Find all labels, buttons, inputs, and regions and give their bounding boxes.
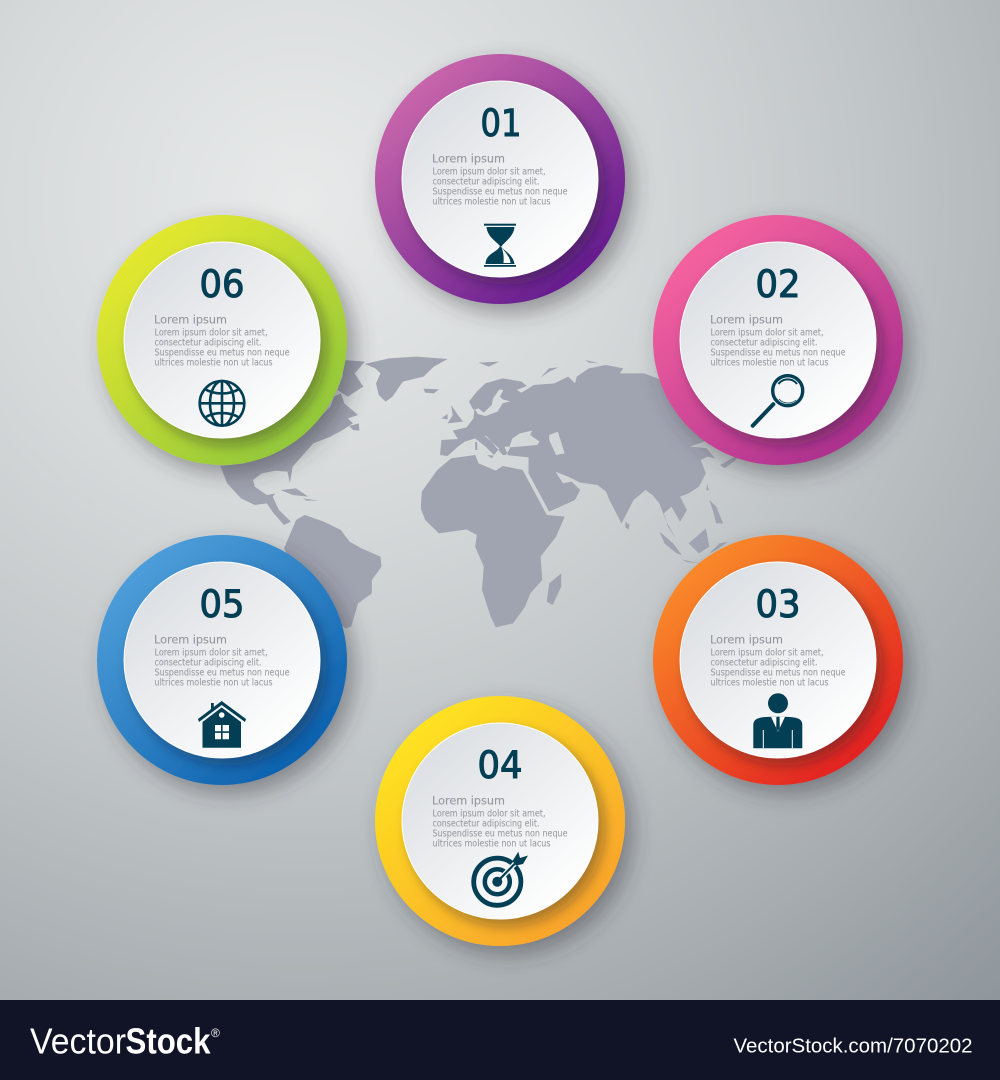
- number 01: 01: [480, 102, 522, 145]
- number 05: 05: [200, 583, 244, 626]
- text 01: Lorem ipsum: [432, 152, 505, 166]
- disc 01: [402, 81, 598, 277]
- footer bar: [0, 1000, 1000, 1080]
- text 06: Lorem ipsum dolor sit amet,: [154, 327, 268, 338]
- ring 05: [97, 535, 347, 785]
- ring 02: [653, 215, 903, 465]
- number 04: 04: [478, 744, 522, 787]
- logo: VectorStock: ®: [211, 1026, 220, 1040]
- ring 04: [375, 696, 625, 946]
- text 01: Lorem ipsum dolor sit amet,: [432, 166, 546, 177]
- text 06: Lorem ipsum: [154, 313, 227, 327]
- text 05: Lorem ipsum dolor sit amet,: [154, 647, 268, 658]
- logo: VectorStock: Stock: [126, 1020, 211, 1062]
- icon: hourglass: [484, 224, 516, 267]
- text 03: Suspendisse eu metus non neque: [710, 668, 846, 679]
- text 03: Lorem ipsum: [710, 633, 783, 647]
- text 03: ultrices molestie non ut lacus: [710, 678, 829, 689]
- text 04: Lorem ipsum dolor sit amet,: [432, 808, 546, 819]
- text 02: Lorem ipsum: [710, 313, 783, 327]
- panel: step 01: [375, 54, 625, 304]
- text 01: ultrices molestie non ut lacus: [432, 197, 551, 208]
- text 06: Suspendisse eu metus non neque: [154, 348, 290, 359]
- logo: VectorStock: Vector: [30, 1020, 126, 1062]
- text 02: consectetur adipiscing elit.: [710, 337, 818, 348]
- text 02: ultrices molestie non ut lacus: [710, 358, 829, 369]
- text 05: Lorem ipsum: [154, 633, 227, 647]
- world map: [220, 357, 738, 628]
- number 06: 06: [200, 263, 244, 306]
- text 05: ultrices molestie non ut lacus: [154, 678, 273, 689]
- ring 06: [97, 215, 347, 465]
- text 05: [154, 633, 290, 689]
- number 02: 02: [756, 263, 800, 306]
- text 04: consectetur adipiscing elit.: [432, 818, 540, 829]
- panel: step 02: [653, 215, 903, 465]
- icon: target with arrow: [474, 852, 528, 905]
- disc 03: [680, 562, 876, 758]
- panel: step 06: [97, 215, 347, 465]
- text 01: Suspendisse eu metus non neque: [432, 187, 568, 198]
- image id text: VectorStock.com/7070202: [734, 1036, 972, 1058]
- text 03: [710, 633, 846, 689]
- ring 01: [375, 54, 625, 304]
- text 01: [432, 152, 568, 208]
- text 01: consectetur adipiscing elit.: [432, 176, 540, 187]
- text 02: Lorem ipsum dolor sit amet,: [710, 327, 824, 338]
- icon: house: [198, 701, 246, 748]
- text 05: Suspendisse eu metus non neque: [154, 668, 290, 679]
- text 03: consectetur adipiscing elit.: [710, 657, 818, 668]
- logo: VectorStock: [30, 1020, 220, 1062]
- text 06: ultrices molestie non ut lacus: [154, 358, 273, 369]
- text 04: ultrices molestie non ut lacus: [432, 839, 551, 850]
- disc 06: [124, 242, 320, 438]
- icon: magnifying glass: [753, 376, 803, 426]
- icon: globe: [200, 381, 244, 426]
- panel: step 03: [653, 535, 903, 785]
- disc 02: [680, 242, 876, 438]
- panel: step 05: [97, 535, 347, 785]
- text 06: [154, 313, 290, 369]
- text 02: [710, 313, 846, 369]
- text 04: [432, 794, 568, 850]
- text 05: consectetur adipiscing elit.: [154, 657, 262, 668]
- text 03: Lorem ipsum dolor sit amet,: [710, 647, 824, 658]
- disc 04: [402, 723, 598, 919]
- icon: businessman: [753, 693, 802, 748]
- text 02: Suspendisse eu metus non neque: [710, 348, 846, 359]
- panel: step 04: [375, 696, 625, 946]
- text 04: Suspendisse eu metus non neque: [432, 829, 568, 840]
- disc 05: [124, 562, 320, 758]
- text 04: Lorem ipsum: [432, 794, 505, 808]
- text 06: consectetur adipiscing elit.: [154, 337, 262, 348]
- ring 03: [653, 535, 903, 785]
- number 03: 03: [756, 583, 800, 626]
